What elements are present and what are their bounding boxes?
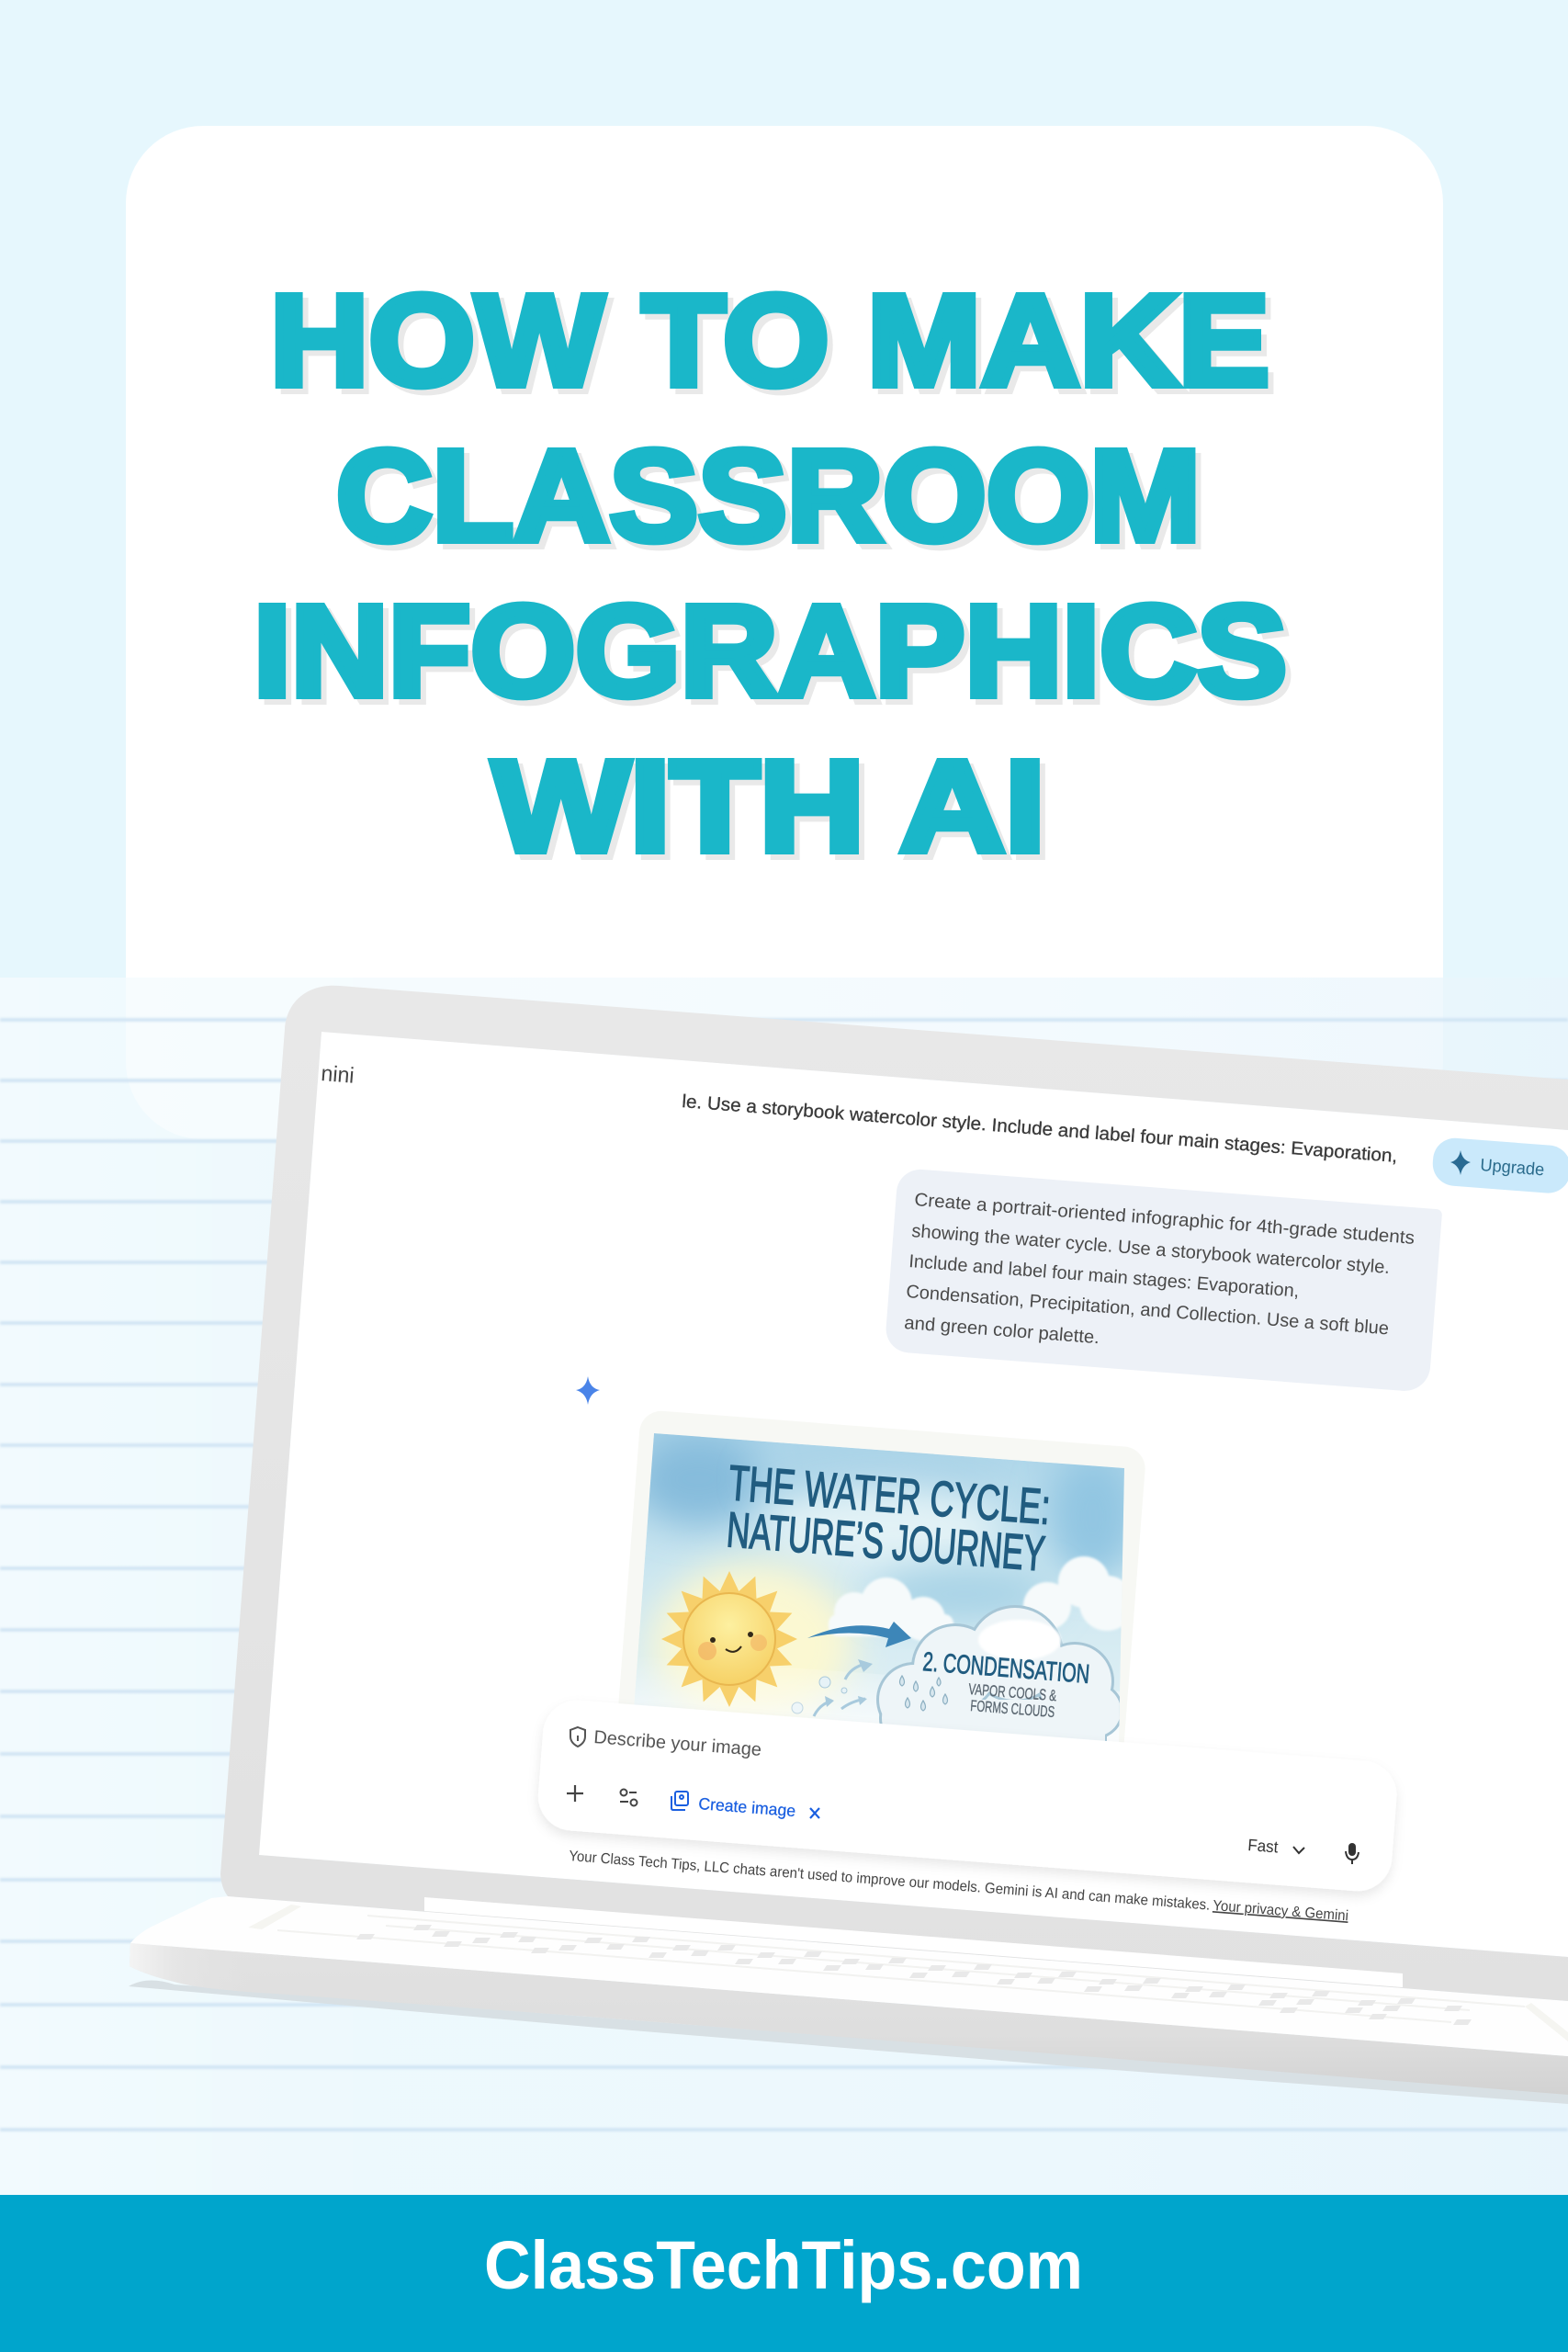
title: CLASSROOM	[336, 423, 1201, 568]
condensation label: 2. CONDENSATION	[921, 1647, 1090, 1690]
user prompt bubble: Condensation, Precipitation, and Collection. Use a soft blue	[906, 1282, 1390, 1339]
title: INFOGRAPHICS	[254, 578, 1287, 723]
model selector: Fast	[1247, 1836, 1279, 1857]
title: HOW TO MAKE	[270, 267, 1269, 413]
illustration title: THE WATER CYCLE:	[727, 1455, 1053, 1535]
condensation label	[922, 1652, 1089, 1718]
icon: create image	[671, 1792, 688, 1810]
condensation label: FORMS CLOUDS	[970, 1697, 1055, 1721]
icon: microphone	[1346, 1843, 1359, 1864]
laptop screen	[259, 1032, 1568, 1957]
disclaimer text: Your privacy & Gemini	[1213, 1898, 1349, 1924]
laptop	[129, 986, 1568, 2104]
user prompt bubble	[885, 1168, 1442, 1393]
icon: gemini sparkle	[576, 1376, 600, 1405]
create image chip: Create image	[698, 1794, 796, 1820]
footer url: ClassTechTips.com	[484, 2227, 1083, 2303]
title: WITH AI	[492, 733, 1045, 878]
laptop base top	[130, 1896, 1568, 2056]
condensation label: VAPOR COOLS &	[968, 1680, 1057, 1704]
user prompt bubble: Include and label four main stages: Evaporation,	[908, 1251, 1300, 1302]
image bottom fade	[634, 1673, 1120, 1742]
icon: sun	[661, 1571, 797, 1707]
arrow	[807, 1622, 911, 1647]
generated image card	[619, 1411, 1145, 1742]
title: CLASSROOM	[342, 428, 1206, 573]
clouds	[829, 1556, 1134, 1641]
laptop lid bezel	[220, 986, 1568, 2001]
icon: plus	[567, 1785, 583, 1802]
keyboard	[248, 1905, 1568, 2041]
heading fragment: Gemini: nini	[321, 1061, 355, 1089]
user prompt bubble: and green color palette.	[904, 1313, 1100, 1348]
create image chip	[671, 1792, 819, 1820]
prompt placeholder: Describe your image	[593, 1727, 762, 1760]
upgrade button	[1431, 1136, 1568, 1194]
prompt header line: le. Use a storybook watercolor style. Include and label four main stages: Evaporation,	[682, 1091, 1398, 1167]
title	[254, 267, 1292, 884]
white title panel	[126, 126, 1443, 1139]
model selector	[1247, 1836, 1304, 1857]
title: INFOGRAPHICS	[259, 583, 1292, 729]
icon: shield	[570, 1727, 585, 1747]
icon: tools sliders	[620, 1790, 637, 1806]
watercolor illustration	[635, 1433, 1124, 1742]
user prompt bubble: showing the water cycle. Use a storybook watercolor style.	[911, 1221, 1391, 1278]
upgrade button: Upgrade	[1480, 1156, 1545, 1180]
laptop base front	[130, 1943, 1568, 2095]
title: HOW TO MAKE	[276, 273, 1275, 418]
laptop hinge bar	[424, 1897, 1403, 1987]
disclaimer text: Your Class Tech Tips, LLC chats aren't used to improve our models. Gemini is AI and can make mistakes.	[569, 1849, 1211, 1914]
illustration title: NATURE’S JOURNEY	[725, 1502, 1047, 1582]
footer bar	[0, 2195, 1568, 2352]
notebook paper overlay	[0, 978, 1568, 2195]
prompt input box	[536, 1698, 1399, 1894]
user prompt bubble: Create a portrait-oriented infographic for 4th-grade students	[914, 1190, 1416, 1249]
vapor bubbles and arrows	[792, 1659, 873, 1716]
water droplets	[900, 1676, 948, 1711]
illustration title	[728, 1464, 1049, 1571]
icon: upgrade sparkle	[1450, 1150, 1471, 1175]
title: WITH AI	[498, 739, 1051, 884]
laptop shadow	[129, 1980, 1568, 2104]
